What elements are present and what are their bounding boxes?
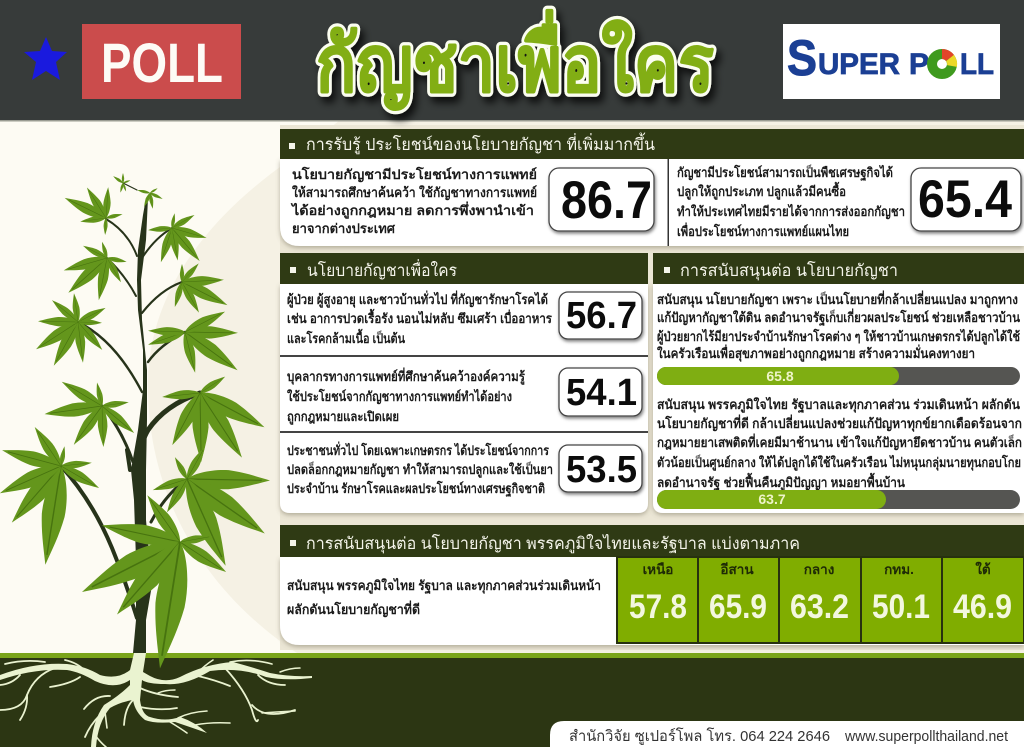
title: กัญชาเพื่อใคร [316, 9, 714, 110]
general public text: ประชาชนทั่วไป โดยเฉพาะเกษตรกร ได้ประโยชน์จากการ [287, 441, 549, 458]
region cell: south: ใต้ [975, 561, 991, 577]
icon: blue star [24, 37, 67, 80]
leaf [148, 212, 208, 264]
medical staff text: ใช้ประโยชน์จากกัญชาทางการแพทย์ทำได้อย่าง [287, 388, 512, 405]
patients text: ผู้ป่วย ผู้สูงอายุ และชาวบ้านทั่วไป ที่กัญชารักษาโรคได้ [287, 290, 548, 308]
stat 56.7: 56.7 [566, 295, 637, 337]
footer contact: www.superpollthailand.net [844, 728, 1009, 745]
medical benefit text: ให้สามารถศึกษาค้นคว้า ใช้กัญชาทางการแพทย์ [292, 184, 537, 201]
medical staff text: บุคลากรทางการแพทย์ที่ศึกษาค้นคว้าองค์ความรู้ [287, 367, 525, 385]
Super Poll logo [783, 24, 1000, 99]
header band [0, 0, 1024, 122]
regional support text: ผลักดันนโยบายกัญชาที่ดี [287, 600, 420, 618]
leaf [76, 492, 230, 671]
support reasons text [657, 290, 1020, 362]
section heading: การสนับสนุนต่อ นโยบายกัญชา [680, 261, 898, 281]
support reasons text: ในครัวเรือนเพื่อสุขภาพอย่างถูกกฎหมาย สร้างความมั่นคงทางยา [657, 344, 975, 362]
section heading [280, 129, 1024, 159]
region cell: north [617, 557, 698, 643]
panel: policy for whom [280, 253, 648, 513]
patients text: และโรคกล้ามเนื้อ เป็นต้น [287, 328, 405, 346]
support government text: ลดอำนาจรัฐ ช่วยฟื้นคืนภูมิปัญญา หมอยาพื้นบ้าน [657, 472, 905, 492]
footer contact [550, 721, 1024, 747]
patients text: เช่น อาการปวดเรื้อรัง นอนไม่หลับ ซึมเศร้า เบื่ออาหาร [287, 308, 552, 326]
bar 65.8: 65.8 [766, 368, 794, 384]
economic benefit text: ปลูกให้ถูกประเภท ปลูกแล้วมีคนซื้อ [677, 181, 846, 200]
general public text: ประจำบ้าน รักษาโรคและผลประโยชน์ทางเศรษฐกิจชาติ [287, 480, 545, 498]
region cell: central: กลาง [804, 562, 834, 577]
stat 65.4: 65.4 [918, 170, 1012, 229]
section heading: การสนับสนุนต่อ นโยบายกัญชา พรรคภูมิใจไทยและรัฐบาล แบ่งตามภาค [306, 534, 800, 554]
region cell: central [779, 557, 861, 643]
stat 53.5: 53.5 [566, 449, 637, 491]
region cell: south [942, 557, 1024, 643]
leaf [33, 293, 107, 369]
leaf [172, 261, 230, 315]
section heading: การรับรู้ ประโยชน์ของนโยบายกัญชา ที่เพิ่มมากขึ้น [306, 132, 655, 155]
medical staff text: ถูกกฎหมายและเปิดเผย [287, 409, 399, 425]
plant stem and branches [61, 183, 200, 653]
region cell: Bangkok: 50.1 [872, 588, 930, 626]
economic benefit text: เพื่อประโยชน์ทางการแพทย์แผนไทย [677, 222, 849, 239]
regional support text [287, 577, 601, 618]
medical benefit text: ยาจากต่างประเทศ [292, 221, 396, 236]
region cell: north: 57.8 [629, 588, 687, 626]
region cell: northeast [698, 557, 779, 643]
region cell: Bangkok: กทม. [884, 562, 914, 577]
region cell: north: เหนือ [643, 562, 673, 577]
ground band [0, 653, 1024, 747]
bar 65.8 [657, 367, 1020, 385]
title: กัญชาเพื่อใคร [316, 9, 714, 110]
leaf [44, 377, 137, 448]
Super Poll logo: LL [960, 48, 994, 81]
section heading [280, 253, 648, 284]
patients text [287, 290, 552, 346]
stat 86.7: 86.7 [561, 171, 652, 230]
medical benefit text: นโยบายกัญชามีประโยชน์ทางการแพทย์ [292, 166, 537, 183]
section heading [653, 253, 1024, 284]
leaf [62, 185, 123, 235]
bar 63.7: 63.7 [758, 491, 786, 507]
panel: support for policy [653, 253, 1024, 513]
stat 54.1: 54.1 [566, 372, 637, 414]
leaf [112, 173, 131, 193]
section heading: นโยบายกัญชาเพื่อใคร [307, 259, 457, 280]
region cell: northeast: 65.9 [709, 588, 767, 626]
medical staff text [287, 367, 525, 425]
region cell: central: 63.2 [790, 588, 849, 626]
leaf [0, 424, 102, 567]
panel body [280, 159, 1024, 246]
general public text [287, 441, 553, 498]
region cell: Bangkok [861, 557, 942, 643]
Super Poll logo: P [909, 48, 929, 81]
leaf [137, 187, 163, 209]
leaf [62, 241, 127, 301]
support government text [657, 396, 1022, 492]
bar 63.7 [657, 490, 1020, 509]
POLL badge: POLL [101, 31, 223, 94]
Super Poll logo: S [787, 30, 817, 86]
economic benefit text [677, 163, 905, 239]
region cell: northeast: อีสาน [720, 562, 754, 577]
leaf [162, 374, 268, 462]
Super Poll logo: UPER [818, 48, 900, 81]
region cell: south: 46.9 [953, 588, 1012, 626]
section heading [280, 525, 1024, 557]
leaf [151, 445, 271, 570]
panel: support by region [280, 525, 1024, 645]
panel: perception of benefits [280, 129, 1024, 246]
cannabis plant illustration [0, 173, 312, 747]
general public text: ปลดล็อกกฎหมายกัญชา ทำให้สามารถปลูกและใช้เป็นยา [287, 460, 553, 478]
regional support text: สนับสนุน พรรคภูมิใจไทย รัฐบาล และทุกภาคส่วนร่วมเดินหน้า [287, 577, 601, 595]
roots [0, 653, 312, 747]
medical benefit text [290, 166, 537, 236]
footer contact: สำนักวิจัย ซูเปอร์โพล โทร. 064 224 2646 [569, 727, 830, 745]
economic benefit text: กัญชามีประโยชน์สามารถเป็นพืชเศรษฐกิจได้ [677, 163, 893, 182]
leaf [147, 307, 242, 376]
economic benefit text: ทำให้ประเทศไทยมีรายได้จากการส่งออกกัญชา [677, 203, 905, 220]
medical benefit text: ได้อย่างถูกกฎหมาย ลดการพึ่งพานำเข้า [290, 201, 534, 219]
